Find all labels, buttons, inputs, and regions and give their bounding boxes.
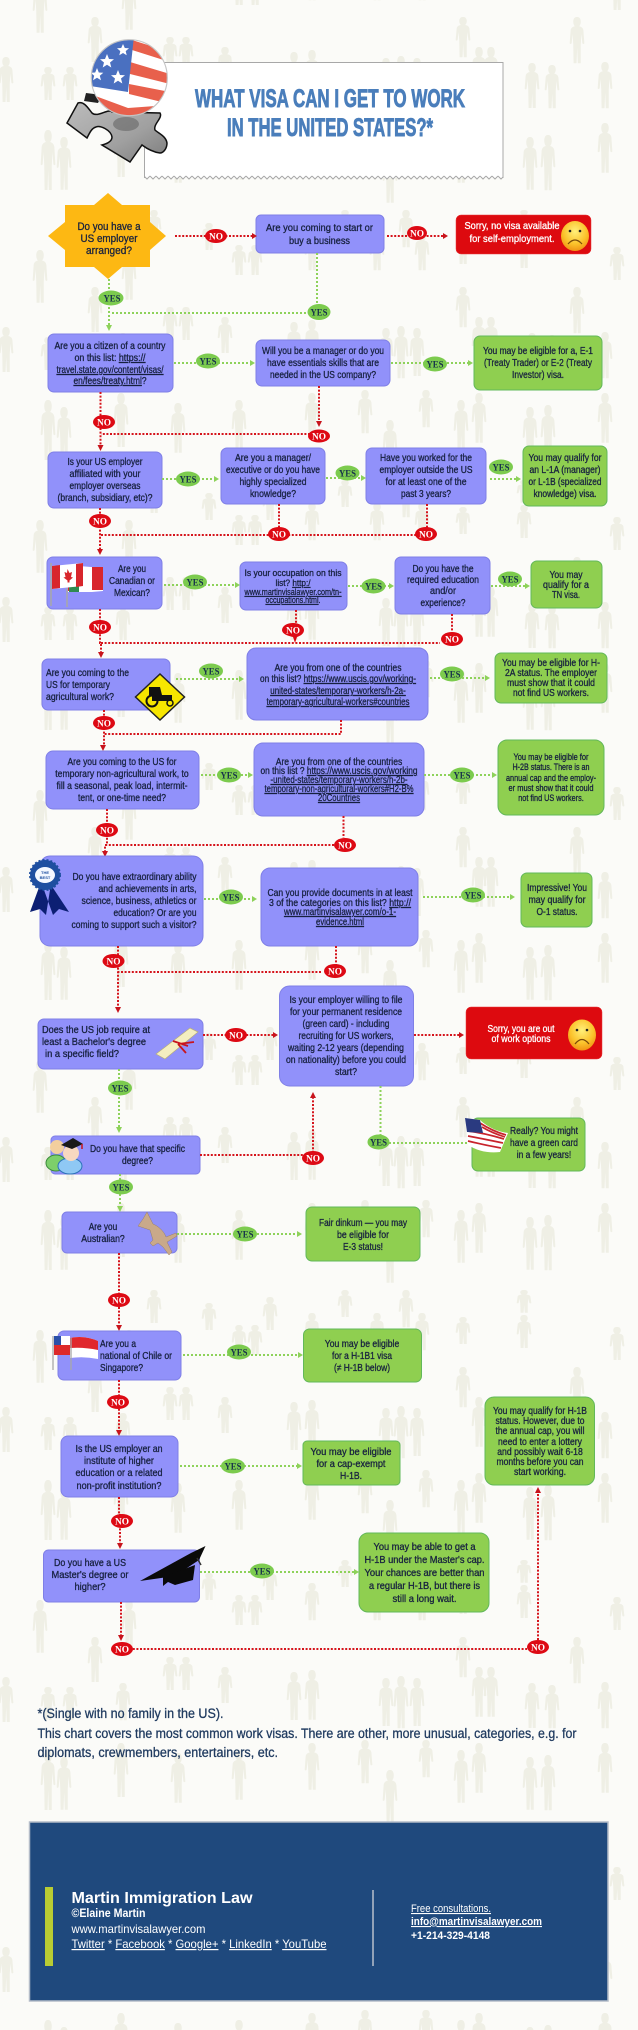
box: manager executive: knowledge? [250, 489, 296, 500]
box: permanent residence: start? [335, 1067, 357, 1078]
outcome: TN visa: You may [550, 570, 582, 581]
arrow: no to Canadian or Mexican: NO [93, 516, 107, 526]
outcome: cap-exempt H-1B [303, 1441, 400, 1485]
title text: WHAT VISA CAN I GET TO WORK [195, 85, 465, 113]
arrow: no to permanent residence from degree: NO [306, 1154, 320, 1164]
contact details [411, 1903, 542, 1942]
box: required education: required education [407, 575, 479, 586]
arrow: yes to cap-exempt: YES [224, 1462, 242, 1472]
box: Canadian or Mexican: Are you [118, 564, 146, 575]
icon: diploma scroll [156, 1028, 198, 1059]
box: affiliated employer: Is your US employer [68, 457, 143, 468]
outcome: H-2A status: must show that it could [507, 678, 595, 689]
box: temporary agricultural work [42, 659, 184, 720]
icon: the best ribbon: BEST [40, 875, 51, 880]
arrow: yes from employer and business [98, 253, 330, 331]
arrow: yes to H-2A countries: YES [202, 666, 220, 676]
icon: kangaroo [138, 1212, 177, 1255]
box: master's degree [44, 1546, 206, 1602]
box: permanent residence: Is your employer willing to file [290, 995, 403, 1006]
box: H-2A countries: on this list? https://www.uscis.gov/working- [260, 674, 416, 685]
arrow: yes to master's cap: YES [254, 1566, 270, 1576]
outcome: O-1 status: Impressive! You [527, 883, 587, 894]
box: Australian [62, 1212, 177, 1255]
outcome: out of work options: Sorry, you are out [488, 1024, 555, 1035]
arrow: no to sorry [387, 226, 448, 240]
outcome: O-1 status: O-1 status. [536, 907, 578, 918]
arrow: yes to education: YES [365, 582, 382, 592]
arrow: yes to H-2B status: YES [454, 770, 470, 780]
outcome: H-2A status: 2A status. The employer [505, 668, 598, 679]
outcome: H-1B lottery: the annual cap, you will [496, 1426, 584, 1437]
icon: sad face [568, 1020, 596, 1050]
arrow: yes to E visa: YES [426, 360, 444, 370]
box: permanent residence [280, 986, 414, 1086]
outcome: E-1 or E-2: You may be eligible for a, E-1 [483, 346, 593, 357]
box: specific degree: Do you have that specific [90, 1144, 185, 1155]
arrow: yes to O-1 status: YES [464, 890, 482, 900]
box: Canadian or Mexican: Canadian or [109, 576, 156, 587]
box: extraordinary ability: coming to support such a visitor? [72, 920, 197, 931]
box: temporary agricultural work: Are you coming to the [46, 668, 129, 679]
box: occupation list: occupations.html. [266, 595, 320, 605]
arrow: yes from employer and business: YES [104, 294, 120, 304]
box: temporary non-agricultural work: Are you coming to the US for [68, 757, 177, 768]
box: manager or essential skills [256, 340, 390, 386]
outcome: TN visa: qualify for a [543, 580, 589, 591]
box: institute of higher education: education or a related [76, 1468, 162, 1479]
outcome: H-2B status: annual cap and the employ- [506, 773, 596, 783]
arrow: yes to master's cap [200, 1564, 359, 1578]
footnote: diplomats, crewmembers, entertainers, etc. [38, 1745, 278, 1760]
box: Canadian or Mexican: Mexican? [114, 588, 150, 599]
arrow: yes to TN [491, 572, 530, 589]
outcome: L-1 visa: or L-1B (specialized [528, 477, 602, 488]
arrow: yes to O-1 evidence: YES [222, 892, 240, 902]
arrow: no to Canadian or Mexican [89, 504, 437, 555]
box: manager executive [221, 448, 325, 504]
box: extraordinary ability: education? Or are you [114, 908, 196, 919]
box: permanent residence: for your permanent residence [290, 1007, 402, 1018]
box: temporary non-agricultural work: fill a seasonal, peak load, intermit- [56, 781, 188, 792]
box: O-1 evidence: 3 of the categories on this list? http:// [269, 898, 411, 909]
arrow: yes to O-1 evidence [204, 890, 257, 904]
arrow: no to extraordinary ability: NO [338, 840, 352, 850]
outcome: H-1B master's cap: still a long wait. [392, 1594, 456, 1605]
arrow: no to H-1B lottery: NO [531, 1642, 545, 1652]
box: manager or essential skills: Will you be a manager or do you [262, 346, 384, 357]
arrow: to out of options [414, 1032, 464, 1038]
box: H-2B countries: on this list ? https://www.uscis.gov/working [260, 766, 418, 777]
title text: IN THE UNITED STATES?* [227, 114, 433, 142]
outcome: cap-exempt H-1B: for a cap-exempt [316, 1459, 386, 1470]
arrow: no to agricultural: NO [286, 626, 300, 636]
arrow: no to Canadian or Mexican: NO [419, 530, 433, 540]
box: affiliated employer: (branch, subsidiary, etc)? [58, 493, 153, 504]
box: manager executive: Are you a manager/ [235, 453, 311, 464]
outcome: E-3 status: E-3 status! [343, 1242, 383, 1253]
outcome: H-2A status: You may be eligible for H- [502, 658, 600, 669]
outcome: H-1B lottery: need to enter a lottery [498, 1437, 582, 1448]
outcome: H-1B1 visa [304, 1329, 422, 1382]
arrow: yes to L-1: YES [492, 462, 510, 472]
outcome: TN visa [531, 561, 602, 608]
arrow: yes to H-2B countries [201, 768, 253, 782]
title panel [144, 62, 503, 180]
outcome: TN visa: TN visa. [552, 590, 580, 601]
box: affiliated employer: affiliated with your [70, 469, 141, 480]
arrow: no to business [175, 229, 257, 243]
icon: waving US flag [465, 1118, 508, 1152]
arrow: no to affiliated employer: NO [312, 432, 326, 442]
box: O-1 evidence: evidence.html [316, 917, 364, 928]
box: citizen of treaty country: en/fees/treaty.html? [74, 376, 147, 387]
outcome: L-1 visa: knowledge) visa. [534, 489, 596, 500]
box: institute of higher education [61, 1436, 178, 1497]
box: worked outside US: for at least one of the [386, 477, 467, 488]
arrow: no to bachelor's degree [102, 946, 346, 1013]
outcome: H-1B1 visa: (≠ H-1B below) [334, 1363, 390, 1374]
box: specific degree: degree? [122, 1156, 153, 1167]
box: Chile or Singapore: Are you a [100, 1339, 136, 1350]
box: manager or essential skills: have essentials skills that are [267, 358, 379, 369]
arrow: yes to E visa [391, 356, 473, 372]
box: institute of higher education: non-profit institution? [76, 1481, 162, 1492]
arrow: yes to education [348, 578, 394, 594]
start: do you have a US employer: Do you have a [78, 221, 141, 233]
box: H-2A countries: temporary-agricultural-workers#countries [266, 697, 410, 708]
box: manager executive: executive or do you have [226, 465, 320, 476]
outcome: H-2A status: not find US workers. [513, 688, 589, 699]
arrow: yes from employer and business: YES [310, 308, 328, 318]
arrow: no to extraordinary ability [96, 809, 356, 857]
arrow: no to master's degree: NO [115, 1516, 129, 1526]
outcome: H-2B status [498, 740, 604, 815]
arrow: yes to H-1B1 [183, 1344, 303, 1360]
box: Australian: Are you [89, 1222, 117, 1233]
box: citizen of treaty country: on this list: https:// [74, 353, 146, 364]
firm details: www.martinvisalawyer.com [71, 1922, 205, 1936]
outcome: no visa for self-employment: for self-employment. [470, 234, 554, 245]
outcome: no visa for self-employment [456, 215, 591, 254]
arrow: yes to Australian: YES [112, 1182, 130, 1192]
outcome: green card in a few years [465, 1118, 585, 1171]
box: O-1 evidence: www.martinvisalawyer.com/o-1- [283, 907, 396, 918]
box: institute of higher education: institute of higher [84, 1456, 155, 1467]
box: extraordinary ability [30, 856, 203, 946]
outcome: green card in a few years: have a green card [510, 1138, 578, 1149]
outcome: no visa for self-employment: Sorry, no visa available [464, 221, 560, 232]
box: Chile or Singapore: Singapore? [100, 1363, 143, 1374]
box: O-1 evidence: Can you provide documents in at least [268, 888, 413, 899]
outcome: H-1B master's cap: H-1B under the Master's cap. [364, 1555, 484, 1566]
outcome: H-1B master's cap: You may be able to get a [374, 1542, 476, 1553]
outcome: H-1B lottery: and possibly wait 6-18 [497, 1447, 583, 1458]
box: institute of higher education: Is the US employer an [76, 1444, 162, 1455]
box: specific degree [46, 1136, 200, 1174]
outcome: H-2A status [495, 653, 607, 703]
box: extraordinary ability: Do you have extraordinary ability [72, 872, 196, 883]
arrow: no to Canadian or Mexican: NO [272, 530, 286, 540]
arrow: yes to H-2A countries [176, 664, 244, 682]
footnote: *(Single with no family in the US). [38, 1706, 224, 1721]
box: permanent residence: on nationality) before you could [286, 1055, 406, 1066]
box: Chile or Singapore: national of Chile or [100, 1351, 173, 1362]
box: required education: and/or [430, 586, 457, 597]
box: H-2A countries [247, 648, 428, 720]
icon: Canada and Mexico flags [51, 563, 103, 607]
arrow: yes to specific degree [108, 1069, 132, 1133]
box: H-2B countries: temporary-non-agricultural-workers#H2-B% [264, 784, 414, 795]
arrow: yes to H-1B1: YES [230, 1348, 248, 1358]
outcome: E-1 or E-2: (Treaty Trader) or E-2 (Treaty [484, 358, 592, 369]
arrow: no to institute of higher education [107, 1380, 129, 1436]
arrow: no to master's degree [111, 1497, 133, 1549]
box: bachelor's degree: Does the US job require at [42, 1025, 150, 1036]
box: bachelor's degree [38, 1019, 203, 1069]
outcome: H-1B master's cap [359, 1533, 489, 1612]
outcome: H-1B lottery: start working. [514, 1467, 566, 1478]
box: start or buy a business: Are you coming to start or [266, 223, 374, 234]
box: master's degree: higher? [74, 1582, 106, 1593]
arrow: no to non-agricultural: NO [97, 718, 111, 728]
footnote: This chart covers the most common work visas. There are other, more unusual, categories, e.g. for [38, 1726, 577, 1741]
arrow: no to institute of higher education: NO [111, 1398, 125, 1408]
box: master's degree: Do you have a US [54, 1558, 126, 1569]
icon: Chile and Singapore flags [53, 1336, 98, 1370]
box: permanent residence: (green card) - including [302, 1019, 390, 1030]
box: manager executive: highly specialized [240, 477, 306, 488]
box: extraordinary ability: and achievements in arts, [98, 884, 196, 895]
box: master's degree: Master's degree or [52, 1570, 129, 1581]
box: occupation list: list? http:/ [276, 578, 311, 588]
outcome: H-1B lottery [485, 1397, 594, 1485]
outcome: E-3 status: be eligible for [337, 1230, 390, 1241]
outcome: H-2B status: You may be eligible for [514, 752, 588, 762]
box: worked outside US: employer outside the US [380, 465, 473, 476]
box: H-2A countries: Are you from one of the countries [274, 663, 402, 674]
contact details: Free consultations. [411, 1903, 491, 1915]
outcome: green card in a few years: in a few years! [517, 1150, 571, 1161]
box: permanent residence: recruiting for US workers, [298, 1031, 394, 1042]
arrow: yes to worked outside: YES [339, 468, 356, 478]
icon: puzzle piece with US flag globe [67, 36, 170, 162]
outcome: H-1B master's cap: Your chances are better than [364, 1568, 484, 1579]
box: start or buy a business: buy a business [289, 236, 350, 247]
outcome: H-1B master's cap: a regular H-1B, but there is [369, 1581, 480, 1592]
box: bachelor's degree: least a Bachelor's degree [42, 1037, 146, 1048]
start: do you have a US employer: arranged? [86, 245, 132, 257]
outcome: E-1 or E-2 [474, 336, 602, 390]
box: H-2A countries: united-states/temporary-workers/h-2a- [270, 686, 406, 697]
arrow: no to Chile or Singapore: NO [112, 1296, 126, 1306]
box: required education [395, 557, 490, 614]
arrow: yes to H-2B countries: YES [220, 770, 238, 780]
arrow: no to permanent residence: NO [229, 1030, 243, 1040]
title text [195, 85, 465, 142]
arrow: yes to H-2A status: YES [444, 670, 460, 680]
arrow: no to permanent residence from degree [200, 1092, 324, 1165]
box: bachelor's degree: in a specific field? [45, 1049, 119, 1060]
arrow: yes to green card [368, 1086, 467, 1150]
box: O-1 evidence [261, 868, 418, 946]
outcome: O-1 status [521, 873, 592, 927]
box: Chile or Singapore [53, 1331, 181, 1380]
outcome: H-2B status: H-2B status. There is an [512, 762, 590, 772]
box: occupation list [240, 562, 347, 610]
box: Canadian or Mexican [47, 557, 162, 609]
firm details [71, 1890, 327, 1951]
box: citizen of treaty country [48, 334, 173, 392]
arrow: yes to occupation: YES [186, 578, 204, 588]
outcome: cap-exempt H-1B: You may be eligible [310, 1447, 392, 1458]
box: temporary agricultural work: US for temporary [46, 680, 110, 691]
firm details: Twitter * Facebook * Google+ * LinkedIn * YouTube [72, 1937, 327, 1951]
outcome: H-1B1 visa: for a H-1B1 visa [332, 1351, 392, 1362]
outcome: cap-exempt H-1B: H-1B. [340, 1471, 362, 1482]
arrow: no to affiliated employer [93, 386, 330, 451]
arrow: no to agricultural [89, 609, 463, 658]
box: temporary non-agricultural work: temporary non-agricultural work, to [55, 769, 189, 780]
box: required education: Do you have the [412, 564, 474, 575]
outcome: H-1B lottery: You may qualify for H-1B [493, 1406, 587, 1417]
footer panel [30, 1822, 608, 2001]
arrow: yes to E-3: YES [236, 1230, 254, 1240]
arrow: yes to occupation [164, 574, 240, 590]
arrow: yes to Australian [109, 1174, 133, 1212]
arrow: yes to E-3 [177, 1226, 302, 1242]
firm details: ©Elaine Martin [72, 1906, 146, 1920]
outcome: L-1 visa: You may qualify for [528, 453, 602, 464]
box: temporary non-agricultural work: tent, or one-time need? [78, 793, 166, 804]
outcome: O-1 status: may qualify for [528, 895, 586, 906]
outcome: E-3 status: Fair dinkum — you may [319, 1218, 407, 1229]
outcome: out of work options: of work options [492, 1034, 550, 1045]
arrow: no to business: NO [209, 232, 223, 242]
arrow: no to affiliated employer: NO [97, 418, 111, 428]
arrow: no to Chile or Singapore [108, 1253, 130, 1331]
box: H-2B countries: -united-states/temporary-workers/h-2b- [270, 775, 408, 786]
arrow: no to sorry: NO [410, 228, 424, 238]
icon: the best ribbon [30, 860, 69, 915]
icon: graduation cap [140, 1546, 206, 1586]
contact details: +1-214-329-4148 [411, 1930, 490, 1942]
arrow: yes to manager executive [162, 472, 219, 486]
box: occupation list: www.martinvisalawyer.com/tn- [244, 587, 342, 597]
box: required education: experience? [420, 598, 466, 609]
arrow: yes to H-2A status [430, 666, 490, 682]
box: Australian: Australian? [81, 1234, 125, 1245]
box: extraordinary ability: science, business, athletics or [82, 896, 197, 907]
outcome: L-1 visa [523, 446, 607, 506]
start: do you have a US employer: US employer [80, 233, 138, 245]
icon: tractor road sign [136, 674, 184, 720]
arrow: yes to L-1 [489, 460, 521, 482]
box: H-2B countries: Are you from one of the countries [276, 757, 402, 768]
box: temporary agricultural work: agricultural work? [46, 692, 114, 703]
outcome: E-3 status [306, 1207, 420, 1261]
arrow: yes to H-2B status [424, 768, 497, 782]
outcome: green card in a few years: Really? You might [510, 1126, 578, 1137]
arrow: no to permanent residence [203, 1028, 278, 1042]
footnote [38, 1706, 577, 1760]
arrow: no to extraordinary ability: NO [100, 826, 114, 836]
outcome: out of work options [466, 1007, 602, 1059]
arrow: yes to manager [174, 354, 255, 368]
box: manager or essential skills: needed in the US company? [270, 370, 376, 381]
box: worked outside US: Have you worked for the [380, 453, 472, 464]
outcome: L-1 visa: an L-1A (manager) [530, 465, 600, 476]
box: start or buy a business [256, 215, 384, 253]
icon: two graduates [46, 1138, 83, 1174]
box: citizen of treaty country: Are you a citizen of a country [54, 341, 166, 352]
box: temporary non-agricultural work [46, 751, 199, 809]
arrow: yes to manager: YES [200, 356, 216, 366]
icon: the best ribbon: THE [41, 870, 49, 875]
outcome: H-1B lottery: months before you can [496, 1457, 584, 1468]
box: affiliated employer: employer overseas [70, 481, 140, 492]
box: citizen of treaty country: travel.state.gov/content/visas/ [56, 365, 164, 376]
box: occupation list: Is your occupation on this [244, 568, 342, 578]
arrow: yes to manager executive: YES [180, 474, 196, 484]
box: permanent residence: waiting 2-12 years (depending [287, 1043, 404, 1054]
icon: sad face [561, 221, 589, 251]
arrow: yes to cap-exempt [180, 1458, 302, 1474]
outcome: H-2B status: er must show that it could [508, 783, 594, 793]
arrow: no to agricultural: NO [93, 622, 107, 632]
arrow: no to non-agricultural [93, 710, 341, 751]
firm details: Martin Immigration Law [72, 1890, 253, 1907]
arrow: yes to specific degree: YES [112, 1084, 128, 1094]
box: H-2B countries [254, 743, 424, 816]
arrow: no to bachelor's degree: NO [328, 966, 342, 976]
box: worked outside US [366, 448, 486, 504]
arrow: yes to TN: YES [502, 574, 518, 584]
start: do you have a US employer [48, 193, 166, 279]
outcome: E-1 or E-2: Investor) visa. [512, 370, 564, 381]
box: H-2B countries: 20Countries [318, 793, 360, 804]
arrow: no to bachelor's degree: NO [106, 956, 120, 966]
outcome: H-2B status: not find US workers. [518, 793, 584, 803]
outcome: H-1B lottery: status. However, due to [496, 1416, 585, 1427]
arrow: no to H-1B lottery [111, 1487, 549, 1656]
arrow: yes to worked outside [326, 466, 366, 481]
arrow: no to agricultural: NO [445, 634, 459, 644]
arrow: yes to green card: YES [370, 1138, 387, 1148]
arrow: yes to O-1 status [423, 888, 515, 902]
outcome: H-1B1 visa: You may be eligible [325, 1339, 400, 1350]
box: worked outside US: past 3 years? [401, 489, 451, 500]
box: affiliated employer [48, 452, 162, 508]
arrow: no to H-1B lottery: NO [115, 1644, 129, 1654]
contact details: info@martinvisalawyer.com [411, 1916, 542, 1928]
